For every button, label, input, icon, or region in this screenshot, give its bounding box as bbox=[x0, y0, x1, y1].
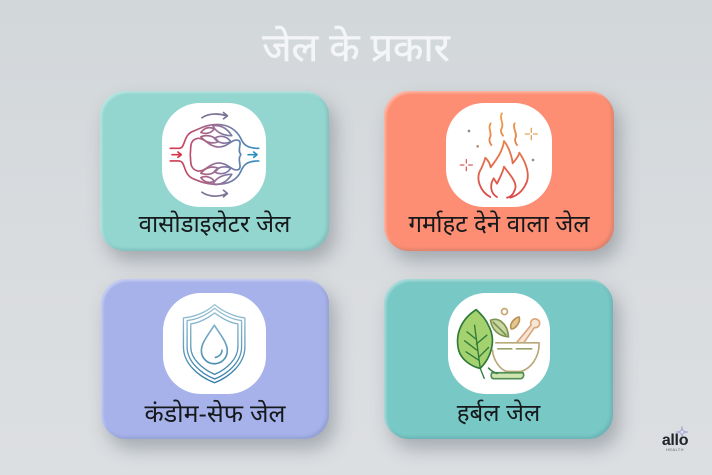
panel: herbal gel bbox=[384, 279, 613, 439]
label: कंडोम-सेफ जेल bbox=[145, 400, 285, 428]
logo: allo health bbox=[662, 426, 688, 452]
label: वासोडाइलेटर जेल bbox=[139, 211, 290, 238]
icon: flame bbox=[446, 103, 552, 207]
label: हर्बल जेल bbox=[457, 400, 540, 427]
icon: shield with drop bbox=[163, 293, 266, 394]
panel: vasodilator gel bbox=[100, 91, 329, 251]
panel: warming gel bbox=[384, 91, 614, 251]
icon: leaf and mortar bbox=[448, 293, 550, 394]
label: गर्माहट देने वाला जेल bbox=[408, 211, 590, 238]
panel: condom-safe gel bbox=[101, 279, 329, 439]
icon: sparkle bbox=[676, 426, 688, 437]
wordmark: allo bbox=[662, 432, 688, 449]
icon: blood vessels bbox=[162, 103, 266, 207]
tagline: HEALTH bbox=[666, 447, 684, 452]
title: जेल के प्रकार bbox=[262, 26, 450, 70]
